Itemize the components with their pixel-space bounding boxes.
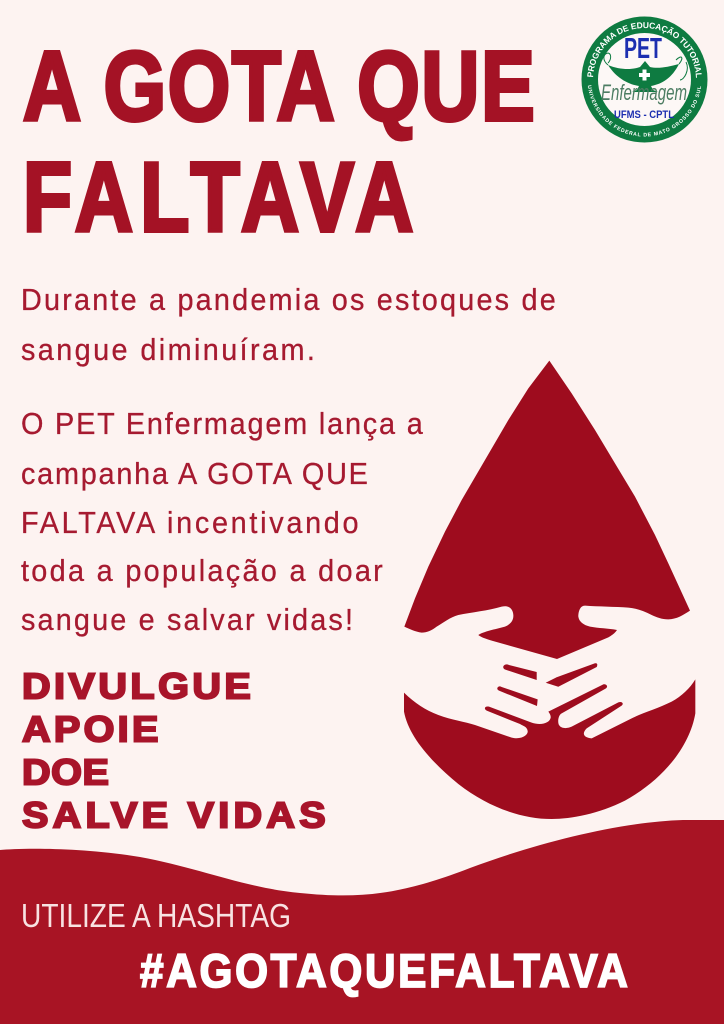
drop upper part bbox=[404, 361, 690, 659]
left finger gap upper bbox=[503, 664, 537, 680]
campaign text: campanha A GOTA QUE bbox=[21, 457, 368, 491]
call to action: DOE bbox=[22, 753, 109, 793]
campaign text bbox=[21, 407, 423, 637]
intro text: sangue diminuíram. bbox=[21, 333, 315, 367]
campaign text: FALTAVA incentivando bbox=[21, 506, 359, 540]
right finger gap upper bbox=[546, 663, 597, 687]
call to action: APOIE bbox=[22, 710, 158, 750]
campaign text: toda a população a doar bbox=[21, 554, 383, 588]
logo ring text bottom: UNIVERSIDADE FEDERAL DE MATO GROSSO DO SUL bbox=[588, 85, 702, 136]
title: FALTAVA bbox=[23, 142, 413, 252]
campaign text: sangue e salvar vidas! bbox=[21, 603, 353, 637]
wave footer bbox=[0, 820, 724, 1024]
intro text bbox=[21, 283, 556, 367]
hashtag: #AGOTAQUEFALTAVA bbox=[140, 946, 628, 998]
logo UFMS: UFMS - CPTL bbox=[614, 109, 674, 121]
call to action: SALVE VIDAS bbox=[22, 796, 326, 836]
title: A GOTA QUE bbox=[23, 31, 535, 141]
hashtag label: UTILIZE A HASHTAG bbox=[21, 897, 291, 934]
intro text: Durante a pandemia os estoques de bbox=[21, 283, 556, 317]
call to action bbox=[22, 667, 326, 836]
logo Enfermagem script: Enfermagem bbox=[601, 80, 687, 105]
logo ring text top: PROGRAMA DE EDUCAÇÃO TUTORIAL bbox=[587, 22, 702, 78]
call to action: DIVULGUE bbox=[22, 667, 251, 707]
logo lamp cord bbox=[604, 53, 687, 80]
icon: blood drop with hands bbox=[404, 361, 695, 819]
logo lamp bbox=[608, 61, 679, 92]
logo PET letters: PET bbox=[624, 33, 662, 65]
title bbox=[23, 31, 535, 252]
left finger gap lower bbox=[497, 686, 538, 706]
logo: PET Enfermagem bbox=[582, 16, 708, 142]
campaign text: O PET Enfermagem lança a bbox=[21, 407, 423, 441]
drop lower part bbox=[404, 679, 695, 819]
logo cross bbox=[639, 70, 650, 80]
